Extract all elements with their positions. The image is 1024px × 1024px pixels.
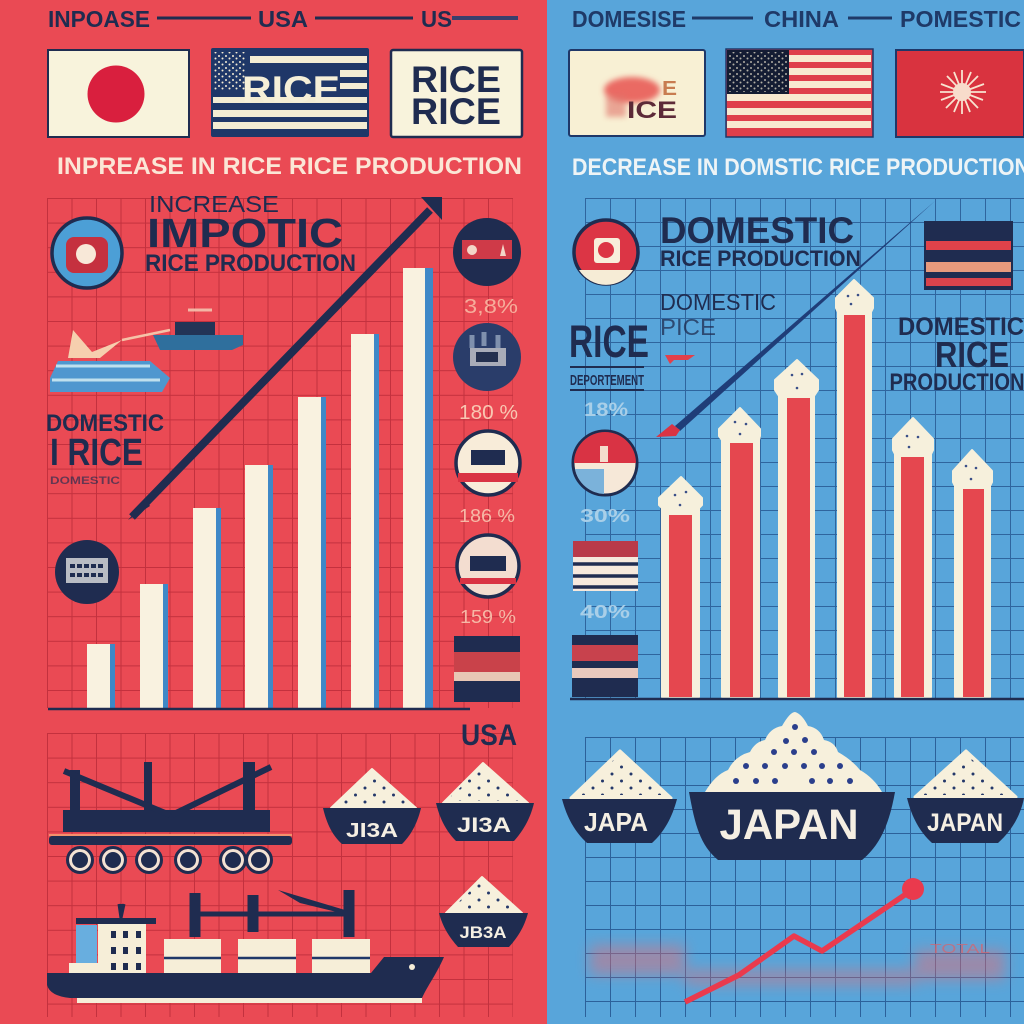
label: percentage 3: 186 % xyxy=(459,506,515,526)
heading: increase in rice production: INPREASE IN RICE RICE PRODUCTION xyxy=(57,153,522,180)
icon: rice bowl left 3 xyxy=(439,877,528,947)
text block: domestic rice left: DOMESTIC xyxy=(46,410,164,437)
icon: large rice bowl JAPAN: JAPAN xyxy=(720,801,858,849)
text block: left increase import title: INCREASE xyxy=(149,191,279,217)
label: percentage a: 18% xyxy=(584,400,628,421)
icon: faded rice flag: ICE xyxy=(627,97,677,124)
icon: flag block xyxy=(454,636,520,702)
text block: right domestic rice production title: DOMESTIC xyxy=(660,210,854,251)
heading: right top banner: DOMESISE xyxy=(572,6,686,32)
line chart: red rising line with haze: TOTAL xyxy=(930,941,990,956)
text block: left increase import title xyxy=(145,191,356,277)
text block: domestic rice left: DOMESTIC xyxy=(50,475,120,487)
icon: small red plane mark xyxy=(665,355,695,364)
heading: left top banner: USA xyxy=(258,6,308,32)
icon: flag stripes a xyxy=(573,541,638,591)
icon: striped USA rice flag xyxy=(211,48,369,137)
bar chart: left rising white bars xyxy=(48,268,470,709)
bar chart: right red bars with rice tops xyxy=(570,280,1024,699)
icon: rice bowl left 2: JI3A xyxy=(457,814,511,837)
icon: rice bowl right small 2: JAPAN xyxy=(927,809,1003,837)
icon: rice bowl right small 1 xyxy=(562,751,677,843)
icon: dark and red flag top right xyxy=(924,221,1013,290)
label: USA: USA xyxy=(461,719,517,752)
icon: badge a xyxy=(573,431,637,495)
icon: striped USA rice flag: RICE xyxy=(242,69,340,110)
text block: left increase import title: RICE PRODUCTION xyxy=(145,250,356,277)
text block: domestic rice left: I RICE xyxy=(50,432,143,474)
icon: rice bowl left 1 xyxy=(323,769,421,844)
label: percentage b: 30% xyxy=(580,506,630,526)
label: percentage 2: 180 % xyxy=(459,402,518,424)
icon: round badge lower left xyxy=(55,540,119,604)
icon: flag of Japan xyxy=(48,50,189,137)
heading: left top banner xyxy=(48,6,518,32)
icon: faded rice flag xyxy=(569,50,705,136)
panel: right blue panel background xyxy=(547,0,1024,1024)
icon: badge 3 xyxy=(456,431,520,495)
text block: rice label with flag xyxy=(569,316,649,390)
label: percentage 4: 159 % xyxy=(460,607,516,627)
panel: left red panel background xyxy=(0,0,547,1024)
icon: rice bowl right small 1: JAPA xyxy=(584,807,648,837)
icon: faded rice flag: E xyxy=(662,78,677,100)
text block: rice label with flag: DEPORTEMENT xyxy=(570,372,644,389)
heading: left top banner: US xyxy=(421,6,452,32)
icon: ships illustration left xyxy=(50,310,243,392)
label: percentage 1: 3,8% xyxy=(464,296,518,318)
text block: domestic rice left xyxy=(46,410,164,487)
heading: right top banner: POMESTIC xyxy=(900,6,1021,32)
icon: rice rice sign: RICE xyxy=(411,59,501,100)
icon: rice bowl left 3: JB3A xyxy=(460,923,506,942)
heading: left top banner: INPOASE xyxy=(48,6,150,32)
heading: right top banner: CHINA xyxy=(764,6,839,32)
icon: round badge top left xyxy=(52,218,122,288)
icon: red flag with star burst xyxy=(896,50,1024,137)
text block: right domestic rice production: RICE xyxy=(935,334,1009,375)
text block: domestic rice small: PICE xyxy=(660,314,716,340)
heading: right top banner xyxy=(572,6,1021,32)
icon: rice bowl left 2 xyxy=(436,763,534,841)
icon: column of badges with percentages xyxy=(453,218,521,702)
icon: navy cargo barge with wheels xyxy=(49,762,292,872)
text block: left increase import title: IMPOTIC xyxy=(147,210,343,256)
icon: flag stripes b xyxy=(572,635,638,697)
icon: rice rice sign xyxy=(391,50,522,137)
text block: domestic rice small xyxy=(660,289,776,340)
text block: rice label with flag: RICE xyxy=(569,316,649,367)
arrow: left rising trend arrow xyxy=(128,197,442,520)
line chart: red rising line with haze xyxy=(590,878,1005,1002)
icon: round badge top right xyxy=(574,220,638,285)
arrow: right navy trend line xyxy=(656,201,935,437)
icon: rice bowl left 1: JI3A xyxy=(346,820,398,842)
text block: domestic rice small: DOMESTIC xyxy=(660,289,776,315)
icon: large rice bowl JAPAN xyxy=(689,712,895,860)
text block: right domestic rice production xyxy=(890,313,1024,396)
icon: badge 4 xyxy=(457,535,519,597)
icon: cargo ship xyxy=(47,890,444,1003)
label: percentage c: 40% xyxy=(580,602,630,622)
icon: USA flag xyxy=(726,49,873,137)
icon: badge 1 xyxy=(453,218,521,286)
icon: rice rice sign: RICE xyxy=(411,91,501,132)
icon: column of right badges and percentages xyxy=(572,400,638,697)
icon: badge 2 xyxy=(453,323,521,391)
text block: right domestic rice production title: RICE PRODUCTION xyxy=(660,246,861,271)
text block: right domestic rice production title xyxy=(660,210,861,271)
icon: rice bowl right small 2 xyxy=(907,751,1024,843)
